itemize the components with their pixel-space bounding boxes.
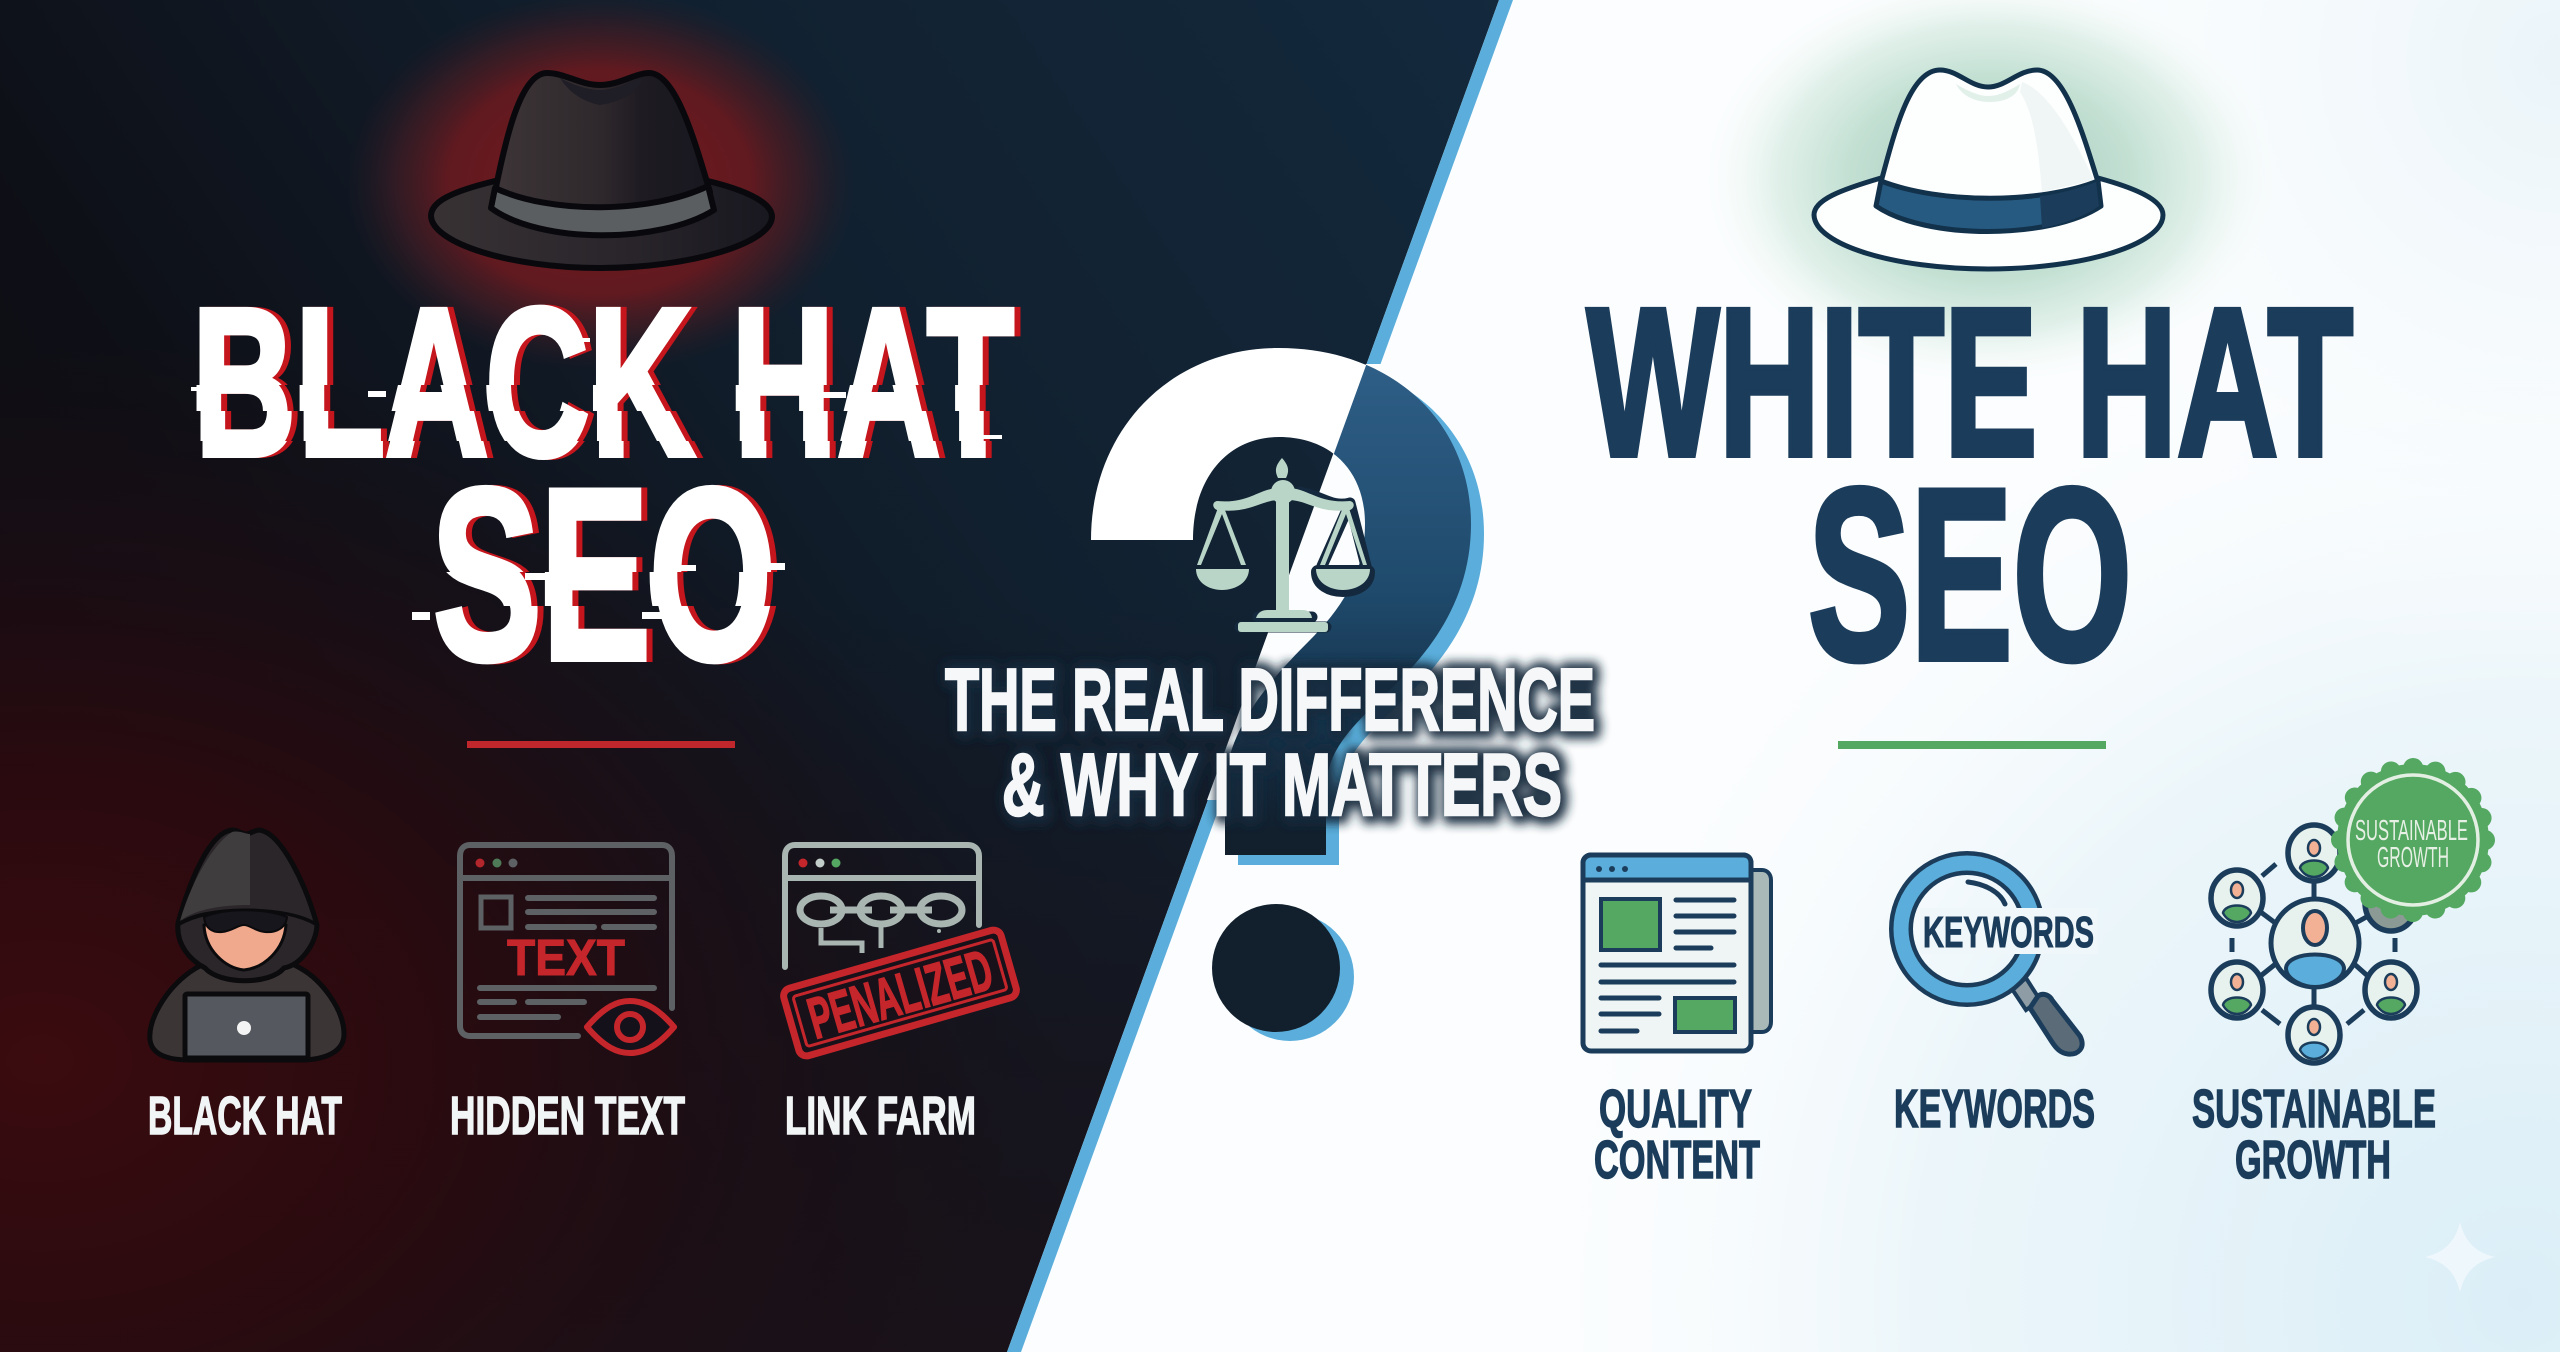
heading: BLACK HAT glitch text: BLACK HAT	[201, 264, 1023, 500]
heading: SEO glitch text	[412, 484, 785, 664]
label: quality content: QUALITY	[1599, 1079, 1752, 1139]
heading: BLACK HAT glitch text: BLACK HAT	[189, 264, 1011, 500]
icon: large question mark	[1091, 348, 1484, 1041]
panel: white hat background	[1000, 0, 2560, 1352]
heading: SEO glitch text: SEO	[427, 437, 772, 711]
panel: black hat background	[0, 0, 1520, 1352]
heading: SEO glitch text: SEO	[437, 437, 782, 711]
badge: sustainable growth seal: GROWTH	[2377, 842, 2449, 874]
heading: SEO glitch text: SEO	[433, 437, 778, 711]
icon: white fedora with green glow	[1705, 0, 2275, 383]
icon: faint sparkle watermark	[2425, 1222, 2495, 1292]
heading: BLACK HAT glitch text: BLACK HAT	[193, 264, 1015, 500]
icon: black fedora with red glow	[345, 0, 855, 372]
icon: network of people	[2211, 825, 2417, 1063]
heading: BLACK HAT glitch text: BLACK HAT	[199, 264, 1021, 500]
icon: magnifier with keywords: KEYWORDS	[1923, 908, 2094, 957]
icon: magnifier with keywords	[1901, 863, 2098, 1054]
heading: SEO glitch text: SEO	[433, 437, 778, 711]
label: hidden text: HIDDEN TEXT	[450, 1086, 685, 1146]
heading: the real difference subtitle: & WHY IT MATTERS	[1002, 735, 1562, 834]
label: quality content: CONTENT	[1594, 1130, 1760, 1190]
heading: BLACK HAT glitch text: BLACK HAT	[192, 264, 1014, 500]
label: quality content	[1594, 1079, 1760, 1190]
icon: link farm with penalized stamp: PENALIZED	[801, 937, 1000, 1052]
heading: the real difference subtitle: THE REAL DIFFERENCE	[945, 650, 1595, 749]
icon: hidden text browser window: TEXT	[507, 929, 625, 986]
heading: the real difference subtitle	[945, 650, 1598, 835]
badge: sustainable growth seal: SUSTAINABLE	[2355, 815, 2468, 847]
label: black hat: BLACK HAT	[148, 1086, 342, 1146]
divider: red underline	[467, 741, 735, 748]
heading: the real difference subtitle: THE REAL DIFFERENCE	[948, 651, 1598, 750]
icon: hidden text browser window	[460, 845, 674, 1053]
icon: hooded hacker with laptop	[150, 830, 344, 1060]
badge: sustainable growth seal	[2337, 764, 2489, 916]
heading: the real difference subtitle: & WHY IT MATTERS	[1005, 736, 1565, 835]
heading: BLACK HAT glitch text	[191, 304, 1020, 460]
icon: scales of justice	[1196, 458, 1370, 632]
diagonal divider stripe	[1007, 0, 1513, 1352]
icon: quality content page	[1583, 855, 1771, 1051]
label: sustainable growth: GROWTH	[2235, 1130, 2391, 1190]
heading: SEO glitch text: SEO	[439, 437, 784, 711]
heading: BLACK HAT glitch text: BLACK HAT	[198, 264, 1020, 500]
label: sustainable growth	[2192, 1079, 2436, 1190]
heading: BLACK HAT glitch text: BLACK HAT	[195, 264, 1017, 500]
heading: SEO glitch text: SEO	[431, 437, 776, 711]
icon: link farm with penalized stamp	[782, 845, 1018, 1058]
heading: BLACK HAT glitch text: BLACK HAT	[195, 264, 1017, 500]
heading: SEO: SEO	[1808, 437, 2132, 711]
label: keywords: KEYWORDS	[1894, 1079, 2095, 1139]
label: link farm: LINK FARM	[785, 1086, 976, 1146]
divider: green underline	[1838, 741, 2106, 749]
